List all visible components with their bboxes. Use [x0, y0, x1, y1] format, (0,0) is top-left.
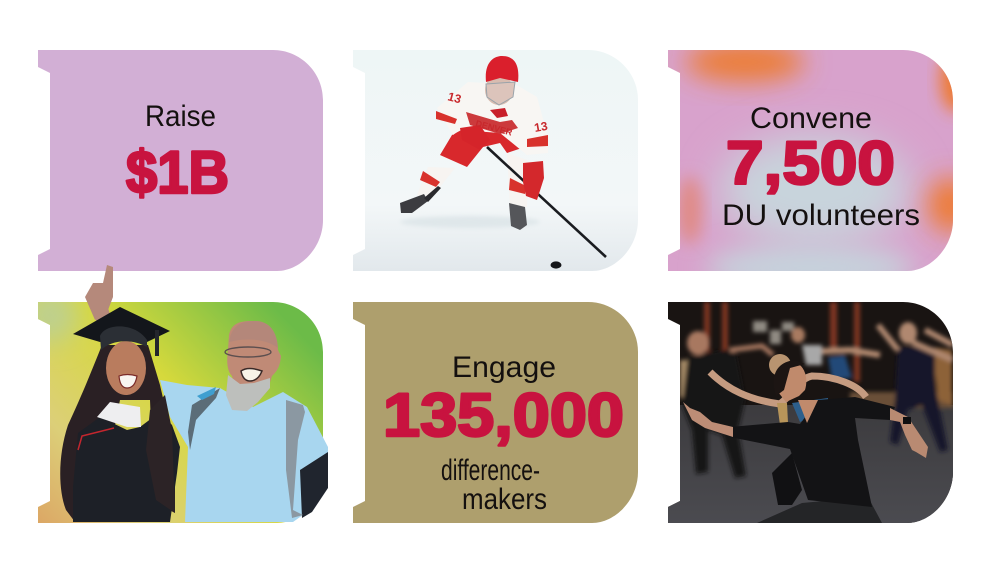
studio floor — [668, 405, 953, 523]
man in blue shirt — [160, 321, 328, 522]
label: DU volunteers: DU volunteers — [722, 199, 920, 232]
blurred background dancers — [680, 302, 953, 478]
panel: graduate and parent photo — [22, 265, 328, 523]
number: $1B: $1B — [126, 139, 229, 206]
studio background — [668, 302, 953, 523]
label: difference-makers: difference- — [441, 454, 540, 487]
panel: engage 135,000 — [353, 302, 638, 523]
hockey player: DENVER — [474, 118, 514, 138]
label: Convene: Convene — [750, 102, 872, 135]
panel shape — [38, 50, 323, 271]
panel: hockey player photo — [353, 50, 638, 271]
graduate in cap and gown — [60, 265, 180, 522]
green gradient background — [38, 302, 323, 523]
puck — [550, 261, 562, 269]
panel: dancers photo — [668, 302, 953, 523]
panel: convene 7,500 — [668, 50, 953, 271]
number: 7,500: 7,500 — [726, 129, 895, 197]
hockey player: 13 — [533, 119, 549, 135]
label: difference-makers: makers — [462, 483, 547, 516]
panel shape — [353, 302, 638, 523]
ice background — [353, 50, 638, 271]
label: Engage: Engage — [452, 351, 556, 384]
label: Raise: Raise — [145, 100, 216, 133]
second dancer — [710, 354, 866, 505]
number: 135,000: 135,000 — [383, 381, 624, 449]
label: difference-makers — [441, 454, 547, 516]
main dancer — [683, 360, 928, 523]
panel: raise $1B — [38, 50, 323, 271]
gradient background — [668, 50, 953, 271]
hockey player: 13 — [446, 89, 463, 106]
hockey player — [400, 56, 606, 257]
